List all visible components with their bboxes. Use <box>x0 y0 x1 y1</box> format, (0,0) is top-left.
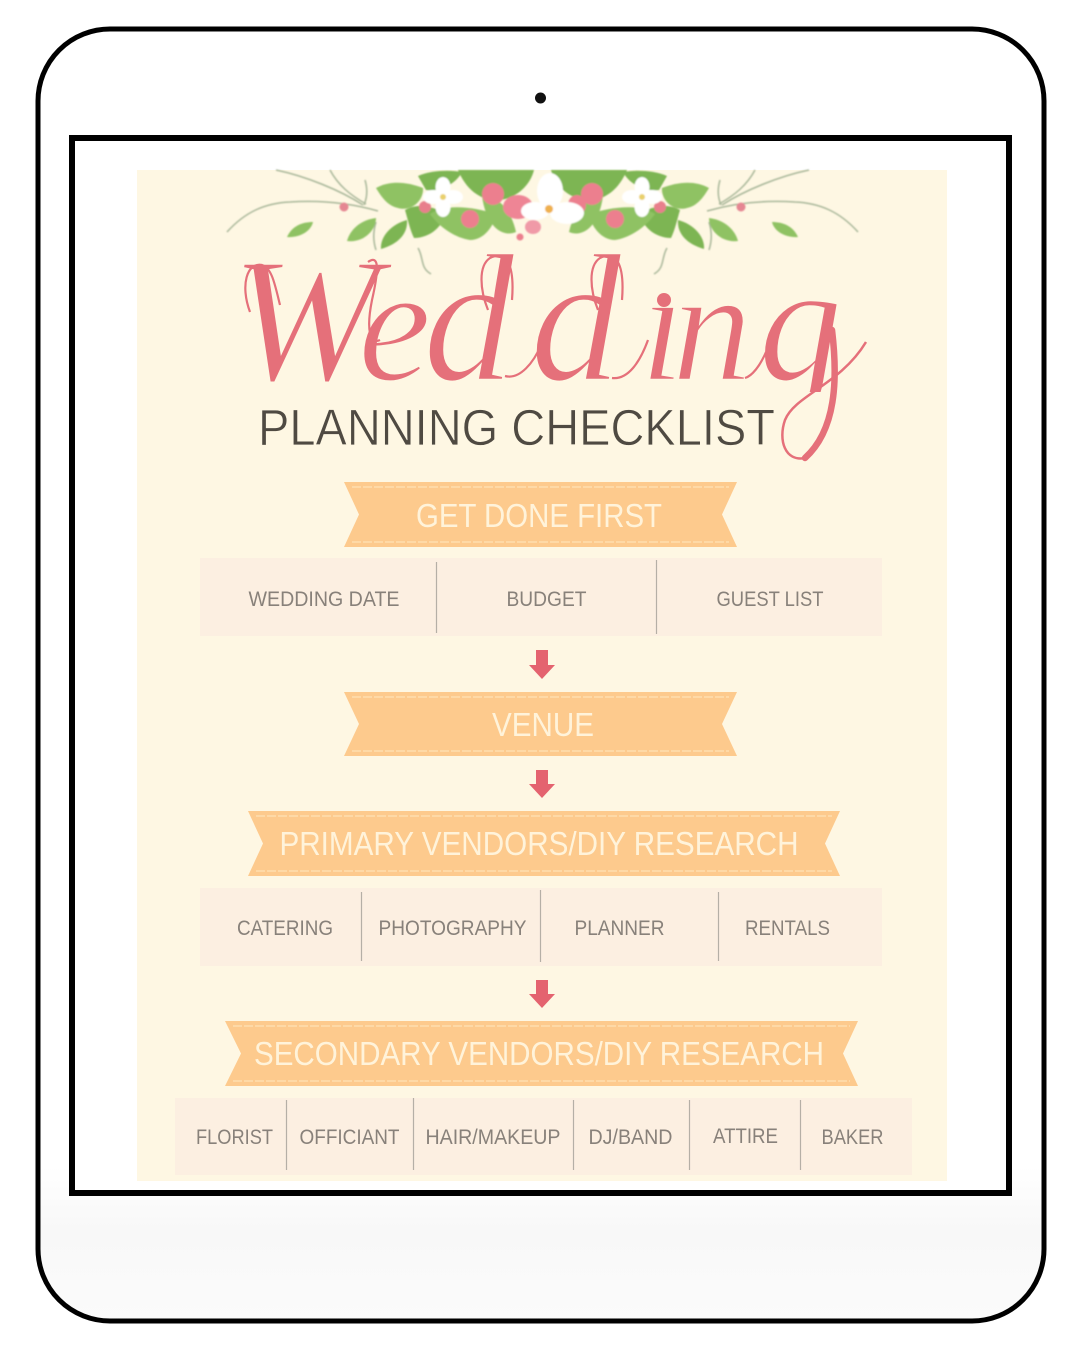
panel: primary vendors <box>200 888 882 966</box>
title: Wedding: W <box>231 221 393 419</box>
checklist poster background <box>137 170 947 1181</box>
ribbon: secondary vendors: SECONDARY VENDORS/DIY RESEARCH <box>254 1035 824 1072</box>
tablet screen <box>72 138 1009 1193</box>
panel: secondary vendors: BAKER <box>822 1126 884 1149</box>
arrow: to secondary vendors <box>529 980 555 1008</box>
panel: secondary vendors <box>175 1098 912 1175</box>
panel: secondary vendors: OFFICIANT <box>300 1126 400 1149</box>
ribbon: venue: VENUE <box>492 706 594 743</box>
panel: first tasks <box>200 558 882 636</box>
ribbon: get done first: GET DONE FIRST <box>416 497 662 534</box>
panel: primary vendors: CATERING <box>237 917 333 940</box>
panel: secondary vendors: HAIR/MAKEUP <box>426 1126 560 1149</box>
title: Wedding: d <box>530 217 622 420</box>
arrow: to primary vendors <box>529 770 555 798</box>
ribbon: primary vendors: PRIMARY VENDORS/DIY RESEARCH <box>280 825 798 862</box>
ribbon: venue <box>344 692 737 756</box>
title: Wedding: i <box>640 237 684 415</box>
floral garland <box>227 170 858 274</box>
panel: secondary vendors: DJ/BAND <box>588 1126 672 1149</box>
panel: primary vendors: RENTALS <box>745 917 830 940</box>
panel: first tasks: BUDGET <box>506 588 587 611</box>
panel: first tasks: GUEST LIST <box>716 588 824 611</box>
subtitle: PLANNING CHECKLIST <box>258 399 775 456</box>
panel: primary vendors: PLANNER <box>574 917 664 940</box>
panel: first tasks: WEDDING DATE <box>248 588 400 611</box>
title: Wedding: d <box>423 217 515 420</box>
arrow: to venue <box>529 650 555 679</box>
ribbon: secondary vendors <box>225 1021 858 1086</box>
title: Wedding: e <box>358 233 431 416</box>
panel: secondary vendors: ATTIRE <box>713 1125 778 1148</box>
panel: secondary vendors: FLORIST <box>196 1126 273 1149</box>
title: Wedding <box>244 254 867 462</box>
panel: primary vendors: PHOTOGRAPHY <box>378 917 526 940</box>
title: Wedding: g <box>758 229 843 417</box>
ribbon: get done first <box>344 482 737 547</box>
ribbon: primary vendors <box>248 811 840 876</box>
camera dot <box>535 92 546 104</box>
title: Wedding: n <box>672 237 752 415</box>
